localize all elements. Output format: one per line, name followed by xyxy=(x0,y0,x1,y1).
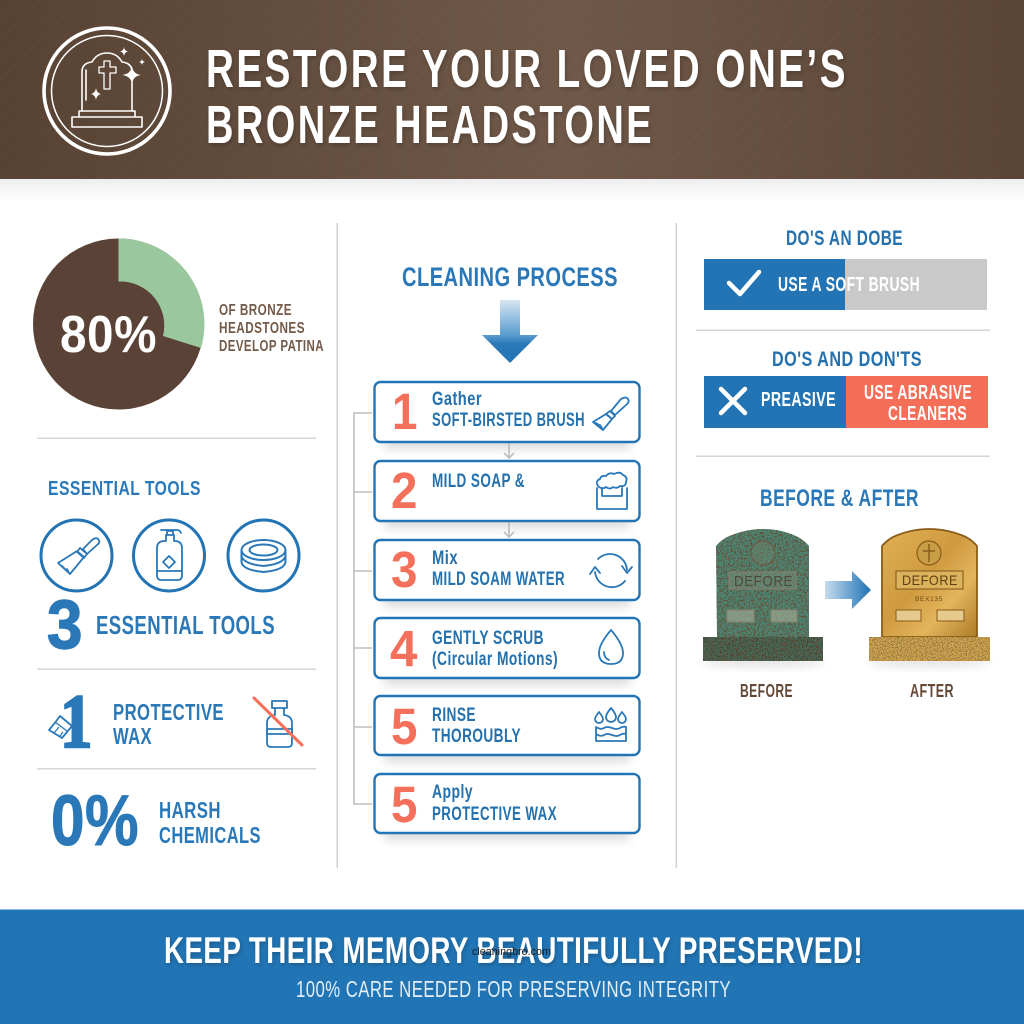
header banner xyxy=(0,0,1024,201)
icon: brush xyxy=(593,398,629,430)
step 2: MILD SOAP & xyxy=(432,471,525,492)
step 3: 3 xyxy=(391,541,418,598)
stat: 0% harsh chemicals: CHEMICALS xyxy=(159,822,261,848)
title: BRONZE HEADSTONE xyxy=(206,95,654,155)
step 4 xyxy=(374,618,640,678)
heading: before & after: BEFORE & AFTER xyxy=(760,485,919,512)
footer banner xyxy=(0,910,1024,1024)
icon: brush in circle xyxy=(41,520,112,591)
step 2 xyxy=(374,461,640,521)
heading: cleaning process: CLEANING PROCESS xyxy=(402,262,618,292)
headstone: before xyxy=(701,529,825,666)
label: before: BEFORE xyxy=(740,681,793,701)
step 5 rinse: THOROUBLY xyxy=(432,726,521,747)
stat: 0% harsh chemicals xyxy=(51,782,261,861)
don't bar: USE ABRASIVE xyxy=(864,382,972,404)
arrow: down xyxy=(482,300,538,363)
stat: 1 protective wax: 1 xyxy=(60,680,93,764)
icon: headstone emblem xyxy=(44,28,170,154)
stat: 1 protective wax xyxy=(49,680,224,764)
icon: crossed-out chemical bottle xyxy=(254,698,302,747)
step 2: 2 xyxy=(391,462,418,519)
stat: 0% harsh chemicals: 0% xyxy=(51,782,139,861)
footer subline: 100% CARE NEEDED FOR PRESERVING INTEGRITY xyxy=(296,976,731,1002)
icon: rinse water xyxy=(595,708,626,741)
don't bar: PREASIVE xyxy=(761,389,836,411)
icon: soap xyxy=(597,473,627,509)
pie chart: 80%: 80% xyxy=(60,306,157,364)
icon: rotate arrows xyxy=(590,554,632,587)
step 5 rinse: RINSE xyxy=(432,705,476,726)
step 1: Gather xyxy=(432,389,482,410)
stat: 3 essential tools: ESSENTIAL TOOLS xyxy=(96,610,275,640)
step arrows xyxy=(504,443,514,537)
pie caption: OF BRONZE xyxy=(219,302,292,319)
pie caption xyxy=(219,302,324,355)
step 5 rinse xyxy=(374,696,640,755)
step 5 apply xyxy=(374,774,640,833)
don't bar xyxy=(704,376,988,428)
step 5 apply: PROTECTIVE WAX xyxy=(432,804,557,825)
headstone: after xyxy=(867,529,991,666)
step 4: (Circular Motions) xyxy=(432,649,558,670)
arrow: before to after xyxy=(825,571,871,609)
step 3 xyxy=(374,540,640,600)
stat: 0% harsh chemicals: HARSH xyxy=(159,797,221,823)
do bar xyxy=(704,259,987,310)
icon: water drop xyxy=(599,630,623,664)
heading: essential tools: ESSENTIAL TOOLS xyxy=(48,478,201,500)
panel: left statistics xyxy=(33,238,324,861)
panel: do's and don'ts xyxy=(696,227,990,457)
stat: 1 protective wax: PROTECTIVE xyxy=(113,699,224,725)
step 1: SOFT-BIRSTED BRUSH xyxy=(432,410,585,431)
don't bar: CLEANERS xyxy=(888,403,967,425)
stat: 3 essential tools: 3 xyxy=(47,586,83,663)
step 4: 4 xyxy=(390,620,418,677)
do bar: USE A SOFT BRUSH xyxy=(778,274,920,296)
process bracket connector xyxy=(354,413,372,804)
heading: do's and don'ts: DO'S AND DON'TS xyxy=(772,348,922,371)
step 5 rinse: 5 xyxy=(391,698,418,755)
step 5 apply: Apply xyxy=(432,782,473,803)
icon: wax tin in circle xyxy=(228,520,299,591)
card shadows xyxy=(384,436,630,840)
pie caption: HEADSTONES xyxy=(219,320,305,337)
step 4: GENTLY SCRUB xyxy=(432,628,544,649)
step 5 apply: 5 xyxy=(391,776,418,833)
title xyxy=(206,39,848,155)
step 1 xyxy=(374,382,640,442)
stat: 3 essential tools xyxy=(47,586,275,663)
label: after: AFTER xyxy=(910,681,954,701)
step 3: Mix xyxy=(432,548,458,569)
stat: 1 protective wax: WAX xyxy=(113,723,152,749)
watermark: cleaningbro.com xyxy=(472,946,551,958)
step 3: MILD SOAM WATER xyxy=(432,569,565,590)
panel: before and after xyxy=(701,485,991,701)
panel: cleaning process xyxy=(354,262,640,840)
headstone: before: DEFORE xyxy=(734,573,793,590)
headstone: after: BEX135 xyxy=(915,597,943,603)
icon: soap bottle in circle xyxy=(134,520,204,591)
headstone: after: DEFORE xyxy=(902,572,958,588)
step 1: 1 xyxy=(392,383,418,440)
heading: do's an dobe: DO'S AN DOBE xyxy=(786,227,903,250)
pie chart: 80% xyxy=(33,238,204,410)
pie caption: DEVELOP PATINA xyxy=(219,338,324,355)
